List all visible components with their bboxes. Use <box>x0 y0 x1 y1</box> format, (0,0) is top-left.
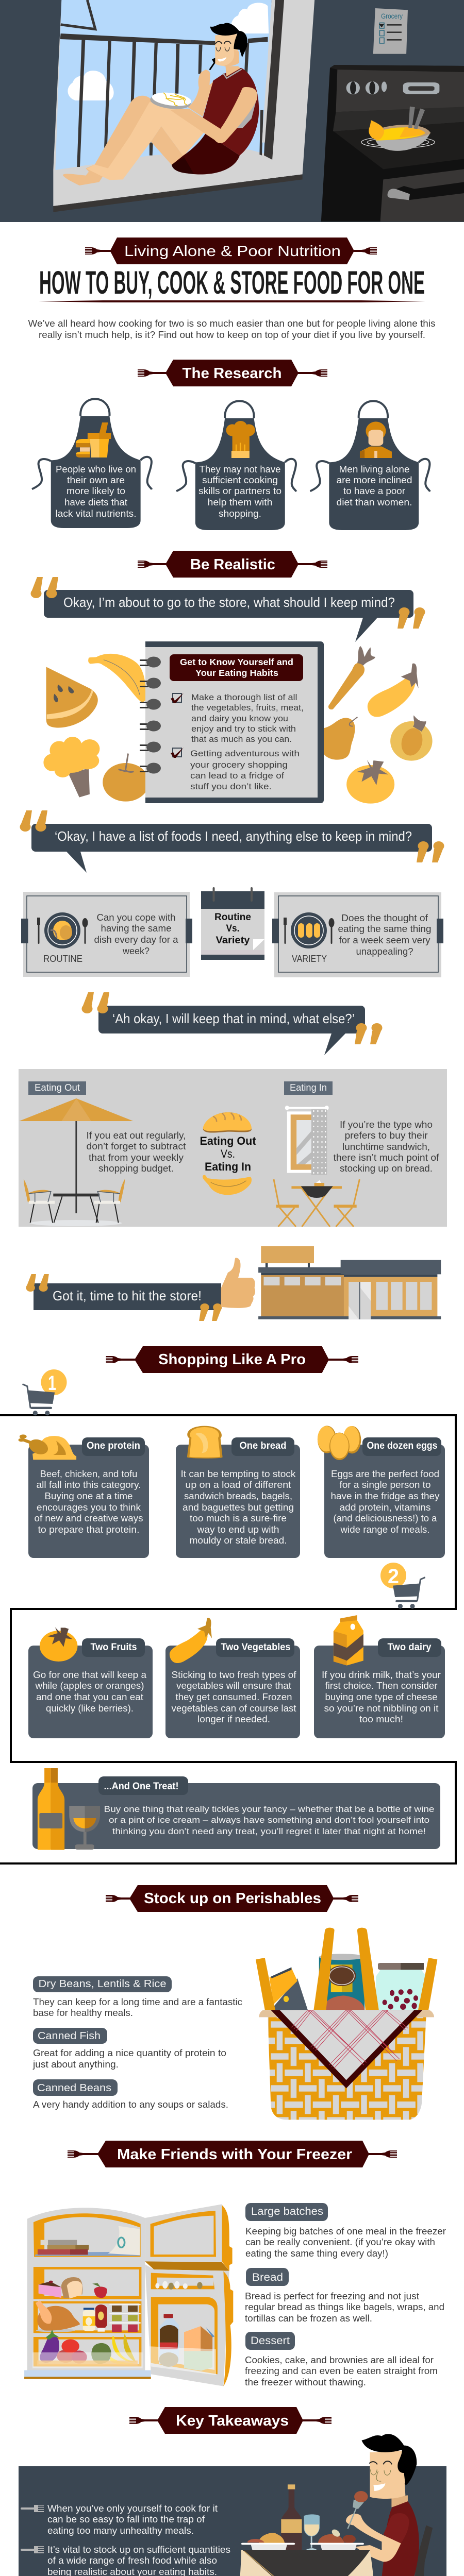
plates of food <box>241 2529 364 2550</box>
subtitle banner: Living Alone & Poor Nutrition <box>124 243 341 260</box>
speech bubble: hit the store <box>26 1274 222 1321</box>
tab: one dozen eggs <box>362 1437 441 1456</box>
panel: apron people living alone: lack vital nutrients. <box>56 509 136 519</box>
icon: man portrait <box>360 421 392 458</box>
block: large batches <box>245 2203 446 2259</box>
card: two vegetables: Sticking to two fresh types of <box>171 1670 297 1680</box>
heading: Shopping Like A Pro <box>106 1346 358 1373</box>
card: two vegetables: vegetables can of course last <box>171 1703 296 1714</box>
heading: The Research <box>138 360 327 386</box>
tab: one dozen eggs: One dozen eggs <box>367 1440 437 1451</box>
panel: apron men living alone: to have a poor <box>343 486 405 496</box>
fridge doors <box>145 2204 233 2386</box>
takeaway two <box>21 2545 230 2576</box>
card: two dairy: first choice. Then consider <box>325 1681 437 1691</box>
checklist item two: can lead to a fridge of <box>190 771 284 781</box>
icon: bread slice <box>187 1426 223 1459</box>
tab: one bread <box>231 1437 294 1456</box>
tab: two vegetables <box>216 1638 294 1657</box>
card: and one treat <box>32 1768 440 1850</box>
heading: Be Realistic: Be Realistic <box>190 556 275 573</box>
panel: eating out vs eating in: lunchtime sandwich, <box>342 1142 430 1152</box>
heading: Make Friends with Your Freezer <box>68 2141 397 2167</box>
tablecloth and table <box>238 2550 376 2576</box>
icon: apple <box>103 754 149 802</box>
icon: plate with chicken <box>37 912 88 948</box>
block: dry beans <box>33 1976 242 2018</box>
panel: eating out vs eating in: don’t forget to subtract <box>87 1141 186 1151</box>
card: and one treat: or a pint of ice cream – always have something and don’t fool yourself into <box>109 1815 429 1825</box>
card: two dairy <box>314 1615 445 1738</box>
block: bread <box>245 2268 444 2324</box>
panel: apron cooking skills <box>176 401 296 530</box>
card: one protein: Beef, chicken, and tofu <box>40 1469 137 1479</box>
icon: orange fruit <box>40 1627 77 1662</box>
card: one protein: to prepare that protein. <box>38 1524 139 1535</box>
card: two fruits: while (apples or oranges) <box>35 1681 144 1691</box>
card: two fruits: quickly (like berries). <box>46 1703 134 1714</box>
heading: Key Takeaways <box>129 2407 332 2434</box>
panel: apron cooking skills: skills or partners to <box>198 486 281 496</box>
notebook heading: Your Eating Habits <box>195 668 278 678</box>
vegetable crisper <box>32 2330 143 2368</box>
card: one bread <box>176 1426 300 1558</box>
notebook heading: Get to Know Yourself and <box>180 657 293 667</box>
illustration: window with curtain and table <box>274 1106 359 1227</box>
door shelf items <box>146 2281 216 2375</box>
panel: routine card: week? <box>122 946 150 956</box>
speech bubble: what else <box>81 992 383 1055</box>
stove with noodle bowl <box>321 65 464 222</box>
calendar: routine vs variety: Vs. <box>226 923 239 934</box>
balcony railing <box>60 0 284 167</box>
turkey and condiments <box>36 2300 141 2332</box>
speech bubble: about to go to the store <box>31 577 425 642</box>
block: canned beans <box>33 2079 228 2110</box>
panel: eating out vs eating in: prefers to buy their <box>344 1130 428 1141</box>
illustration: patio umbrella and table <box>19 1098 133 1226</box>
card: one dozen eggs <box>318 1426 445 1558</box>
takeaway one: When you’ve only yourself to cook for it <box>47 2503 218 2514</box>
panel: apron people living alone: People who live on <box>56 464 136 474</box>
panel: apron people living alone: have diets that <box>64 497 127 507</box>
block: dry beans: They can keep for a long time and are a fantastic <box>33 1997 242 2007</box>
icon: bread loaf <box>203 1112 252 1133</box>
tab: two dairy <box>378 1638 441 1657</box>
icon: tomato <box>346 760 394 804</box>
freezer packages <box>35 2226 140 2256</box>
icon: carrot <box>328 646 375 709</box>
checklist item two: Getting adventurous with <box>190 749 300 758</box>
card: one dozen eggs: wide range of meals. <box>340 1524 430 1535</box>
checklist item two: stuff you don’t like. <box>190 782 272 791</box>
panel: routine card: having the same <box>101 923 171 934</box>
panel: apron cooking skills: sufficient cooking <box>202 475 278 485</box>
card: one protein: all fall into this category. <box>36 1480 141 1490</box>
heading: Stock up on Perishables <box>106 1885 358 1912</box>
panel: eating out vs eating in: Eating Out <box>200 1134 256 1147</box>
speech bubble: hit the store: Got it, time to hit the store! <box>53 1288 202 1303</box>
speech bubble: about to go to the store: Okay, I’m about to go to the store, what should I keep mind? <box>63 595 395 610</box>
card: two vegetables: longer if needed. <box>197 1714 270 1724</box>
checked cloth <box>271 2010 423 2088</box>
panel: variety card <box>272 892 443 977</box>
panel: apron people living alone <box>32 399 152 528</box>
block: large batches: can be really convenient. (if you’re okay with <box>245 2237 435 2247</box>
card: two dairy: buying one type of cheese <box>325 1692 437 1702</box>
checklist item one: the vegetables, fruits, meat, <box>191 703 304 713</box>
man torso and head <box>361 2434 419 2576</box>
checklist item one: and dairy you know you <box>191 714 288 723</box>
panel: eating out vs eating in: stocking up on bread. <box>340 1163 433 1174</box>
hero illustration <box>0 0 464 222</box>
panel: routine card <box>21 892 192 977</box>
icon: wine bottle and glass <box>38 1768 100 1850</box>
card: one bread: too much is a sure-fire <box>190 1513 287 1523</box>
card: one dozen eggs: add protein, vitamins <box>339 1502 431 1513</box>
block: large batches: eating the same thing every day!) <box>245 2248 388 2259</box>
icon: milk carton <box>334 1615 363 1666</box>
icon: cart with number 2: 2 <box>388 1565 399 1588</box>
icon: eggplant <box>170 1618 212 1663</box>
card: one bread: way to end up with <box>196 1524 279 1535</box>
card: two vegetables: they get consumed. Frozen <box>175 1692 292 1702</box>
clouds <box>68 3 269 100</box>
card: two fruits: and one that you can eat <box>36 1692 143 1702</box>
panel: eating out vs eating in: shopping budget. <box>98 1163 174 1174</box>
label: eating out <box>28 1081 86 1095</box>
tab: and one treat <box>98 1776 188 1795</box>
checklist item two <box>171 748 300 791</box>
card: one dozen eggs: have in the fridge as they <box>331 1491 439 1501</box>
panel: apron men living alone: Men living alone <box>339 464 409 474</box>
tab: two vegetables: Two Vegetables <box>221 1642 291 1653</box>
card: one dozen eggs: (and deliciousness!) to a <box>333 1513 438 1523</box>
checklist item one: Make a thorough list of all <box>191 692 297 702</box>
heading: Be Realistic <box>138 551 327 578</box>
card: one protein: Buying one at a time <box>44 1491 133 1501</box>
card: two dairy: too much! <box>359 1714 403 1724</box>
wine bottle and glass <box>281 2484 320 2550</box>
heading: Make Friends with Your Freezer: Make Friends with Your Freezer <box>117 2146 352 2163</box>
panel: apron men living alone: are more inclined <box>336 475 412 485</box>
tab: two fruits <box>82 1638 145 1657</box>
man eating noodles on the window sill <box>63 23 259 185</box>
card: and one treat: Buy one thing that really tickles your fancy – whether that be a bottle of wine <box>104 1804 435 1814</box>
card: one bread: sandwich breads, bagels, <box>184 1491 292 1501</box>
icon: melon slice <box>46 667 98 727</box>
tab: two dairy: Two dairy <box>388 1642 432 1653</box>
card: one dozen eggs: for a single person to <box>339 1480 431 1490</box>
calendar: routine vs variety <box>201 887 264 960</box>
block: bread: regular bread as things like bagels, wraps, and <box>245 2302 444 2312</box>
panel: eating out vs eating in: Eating In <box>205 1160 251 1173</box>
basket contents <box>269 1954 426 2010</box>
icon: bread and drink <box>76 422 111 457</box>
takeaway two: It’s vital to stock up on sufficient quantities <box>47 2545 230 2555</box>
icon: cart with number 1: 1 <box>48 1372 56 1395</box>
block: bread: tortillas can be frozen as well. <box>245 2313 372 2324</box>
label: eating out: Eating Out <box>35 1082 80 1093</box>
window sill and frame <box>53 0 314 212</box>
basket handles <box>256 1928 437 2010</box>
icon: pumpkin <box>390 715 433 761</box>
block: dessert: Dessert <box>251 2335 290 2347</box>
block: canned fish <box>32 2028 226 2070</box>
takeaway two: of a wide range of fresh food while also <box>47 2555 217 2566</box>
chair and legs <box>331 2526 433 2576</box>
block: dry beans: Dry Beans, Lentils & Rice <box>38 1978 166 1990</box>
card: one protein: encourages you to think <box>37 1502 141 1513</box>
man arm and fork <box>346 2491 401 2562</box>
panel: variety card: VARIETY <box>292 954 327 964</box>
icon: chef hat <box>226 421 255 458</box>
panel: eating out vs eating in: there isn’t much point of <box>333 1153 440 1163</box>
illustration: man dining at table <box>238 2434 433 2576</box>
panel: key takeaways <box>19 2466 446 2576</box>
icon: banana bowl <box>203 1175 252 1195</box>
panel: eating out vs eating in: If you’re the type who <box>340 1120 433 1130</box>
block: bread: Bread <box>252 2272 283 2283</box>
panel: apron men living alone <box>310 401 430 530</box>
intro text: really isn’t much help, is it? Find out how to keep on top of your diet if you live by yourself. <box>39 330 425 340</box>
panel: routine card: ROUTINE <box>43 954 82 964</box>
icon: eggs <box>318 1426 361 1460</box>
panel: variety card: unappealing? <box>356 946 413 957</box>
intro text <box>28 318 435 340</box>
card: one bread: and baguettes but getting <box>183 1502 294 1513</box>
card: one bread: mouldy or stale bread. <box>190 1535 287 1546</box>
tab: and one treat: ...And One Treat! <box>104 1781 178 1792</box>
label: eating in: Eating In <box>290 1082 327 1093</box>
icon: plate with bread <box>284 912 334 948</box>
card: two fruits: Go for one that will keep a <box>33 1670 147 1680</box>
panel: eating out vs eating in: that from your weekly <box>89 1153 184 1163</box>
heading: Key Takeaways: Key Takeaways <box>176 2413 289 2429</box>
icon: banana <box>88 654 146 702</box>
icon: broccoli <box>43 737 100 798</box>
card: one bread: up on a load of different <box>186 1480 291 1490</box>
block: large batches: Keeping big batches of one meal in the freezer <box>245 2226 446 2236</box>
checklist item two: your grocery shopping <box>190 760 288 770</box>
panel: apron cooking skills: They may not have <box>199 464 280 474</box>
panel: eating out vs eating in <box>19 1069 447 1227</box>
heading: Stock up on Perishables: Stock up on Perishables <box>144 1890 321 1907</box>
card: and one treat: thinking you don’t need any treat, you’ll regret it later that night at home! <box>112 1826 426 1836</box>
panel: variety card: eating the same thing <box>338 924 431 934</box>
panel: routine card: dish every day for a <box>94 935 179 945</box>
block: dessert: the freezer without thawing. <box>245 2377 366 2387</box>
card: two dairy: so you’re not nibbling on it <box>324 1703 438 1714</box>
panel: apron men living alone: diet than women. <box>336 497 412 507</box>
card: two vegetables <box>165 1618 300 1738</box>
grocery note heading: Grocery <box>381 12 403 20</box>
tab: two fruits: Two Fruits <box>91 1642 137 1653</box>
cake bread and apple <box>39 2277 107 2299</box>
speech bubble: what else: ‘Ah okay, I will keep that in mind, what else?’ <box>112 1011 355 1026</box>
intro text: We’ve all heard how cooking for two is so much easier than one but for people living alone this <box>28 318 435 329</box>
illustration: open refrigerator <box>24 2204 233 2386</box>
panel: apron people living alone: more likely to <box>67 486 125 496</box>
takeaway one: can be so easy to fall into the trap of <box>47 2514 205 2524</box>
block: canned fish: just about anything. <box>32 2059 119 2070</box>
block: bread: Bread is perfect for freezing and not just <box>245 2291 419 2301</box>
block: dessert <box>245 2332 438 2387</box>
tab: one protein: One protein <box>87 1440 140 1451</box>
icon: roast chicken <box>19 1434 76 1460</box>
calendar: routine vs variety: Routine <box>214 912 251 923</box>
block: dry beans: base for healthy meals. <box>33 2008 133 2018</box>
block: dessert: freezing and can even be eaten straight from <box>245 2366 438 2376</box>
block: canned fish: Canned Fish <box>38 2030 101 2042</box>
card: two fruits <box>28 1627 153 1738</box>
card: one protein: of new and creative ways <box>34 1513 143 1523</box>
panel: routine card: Can you cope with <box>97 912 175 923</box>
block: dessert: Cookies, cake, and brownies are all ideal for <box>245 2355 434 2365</box>
card: one bread: It can be tempting to stock <box>180 1469 296 1479</box>
heading: Shopping Like A Pro: Shopping Like A Pro <box>158 1351 306 1368</box>
icon: eggplant <box>368 664 419 717</box>
icon: cart with number 2 <box>380 1563 425 1608</box>
notebook heading <box>170 654 303 681</box>
grocery list note <box>373 8 408 54</box>
panel: apron people living alone: their own are <box>67 475 125 485</box>
block: canned beans: Canned Beans <box>37 2082 111 2094</box>
panel: apron cooking skills: help them with <box>207 497 272 507</box>
panel: eating out vs eating in: If you eat out regularly, <box>87 1130 186 1141</box>
checklist item one <box>171 692 304 744</box>
illustration: grocery store <box>258 1246 441 1319</box>
icons: fruit and vegetables around the notebook <box>43 646 433 804</box>
checklist item one: that as much as you can. <box>191 734 292 744</box>
panel: eating out vs eating in: Vs. <box>221 1147 235 1160</box>
notebook: get to know yourself <box>140 641 324 803</box>
speech bubble: list of foods: ‘Okay, I have a list of foods I need, anything else to keep in mind? <box>55 828 412 844</box>
panel: variety card: for a week seem very <box>339 935 430 945</box>
label: eating in <box>284 1081 333 1095</box>
checklist item one: enjoy and try to stick with <box>191 724 296 734</box>
illustration: picnic basket of pantry goods <box>256 1928 437 2120</box>
panel: apron cooking skills: shopping. <box>219 509 261 519</box>
takeaway one <box>21 2503 218 2536</box>
panel: variety card: Does the thought of <box>341 913 428 923</box>
takeaway one: eating too many unhealthy meals. <box>47 2526 194 2536</box>
subtitle banner <box>85 238 377 264</box>
card: one protein <box>19 1434 149 1558</box>
icon: pear <box>324 717 357 760</box>
card: two dairy: If you drink milk, that’s your <box>322 1670 441 1680</box>
fridge body <box>24 2208 151 2379</box>
notebook spiral rings <box>140 656 161 774</box>
heading: The Research: The Research <box>183 365 281 382</box>
card: two vegetables: vegetables will ensure that <box>176 1681 291 1691</box>
block: canned fish: Great for adding a nice quantity of protein to <box>33 2048 226 2058</box>
tab: one bread: One bread <box>239 1440 287 1451</box>
block: canned beans: A very handy addition to any soups or salads. <box>33 2099 228 2110</box>
speech bubble: list of foods <box>20 810 444 873</box>
frame outlines <box>0 1415 456 1863</box>
card: one dozen eggs: Eggs are the perfect food <box>331 1469 439 1479</box>
icon: cart with number 1 <box>23 1369 67 1415</box>
calendar: routine vs variety: Variety <box>216 935 250 946</box>
block: large batches: Large batches <box>251 2206 323 2217</box>
icon: thumbs up <box>221 1258 255 1308</box>
basket body <box>268 2017 426 2120</box>
tab: one protein <box>82 1437 145 1456</box>
